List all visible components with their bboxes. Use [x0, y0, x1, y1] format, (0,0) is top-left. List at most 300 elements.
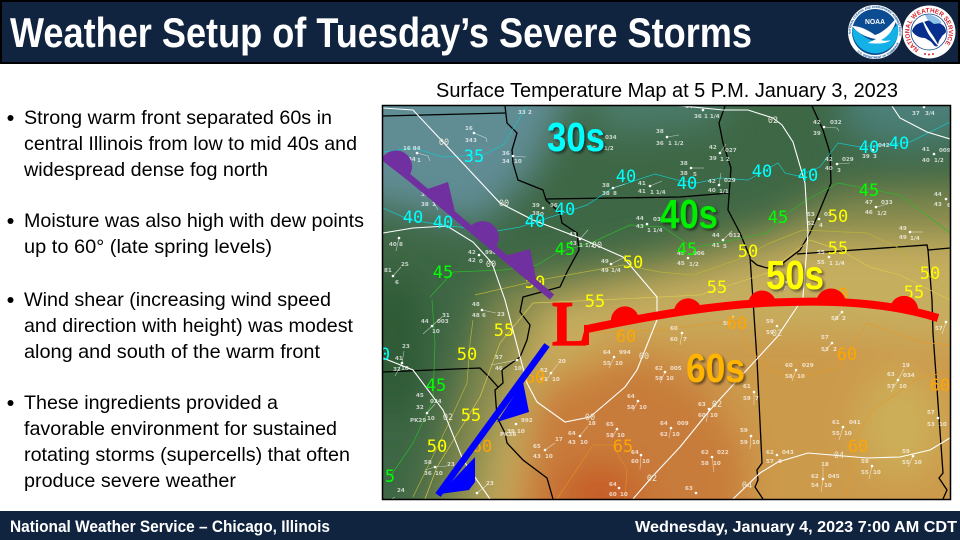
footer: office: National Weather Service – Chicago, Illinois: [10, 517, 330, 536]
station plots: 55: [774, 275, 782, 281]
station plots: 81: [384, 268, 392, 274]
labels: 60-65 orange: 60: [472, 437, 492, 457]
labels: 30s-40s cyan: 35: [464, 147, 484, 167]
station plots: 10: [899, 384, 907, 390]
station plots: 32: [393, 367, 401, 373]
station plots: 63: [887, 372, 895, 378]
labels: 30s-40s cyan: 40: [525, 212, 545, 232]
station plots: 52: [807, 221, 815, 227]
labels: 30s-40s cyan: 40: [403, 208, 423, 228]
icon: NOAA logo: NOAA: [865, 17, 886, 26]
station plots: 54: [811, 483, 819, 489]
station plots: 58: [627, 405, 635, 411]
isotherms: [383, 106, 950, 499]
station plots: 62: [811, 474, 819, 480]
station plots: 43: [533, 454, 541, 460]
station plots: 57: [821, 335, 829, 341]
station plots: 4: [819, 223, 823, 229]
station plots: 1: [432, 202, 436, 208]
station plots: 49: [601, 268, 609, 274]
station plots: 17: [555, 437, 563, 443]
labels: 30s-40s cyan: 0: [380, 345, 390, 365]
station plots: 10: [401, 366, 409, 372]
station plots: 43: [569, 232, 577, 238]
station plots: 43: [636, 224, 644, 230]
station plots: 34: [502, 159, 510, 165]
station plots: 38: [602, 183, 610, 189]
station plots: 1 1/4: [829, 261, 845, 267]
station plots: 029: [724, 178, 736, 184]
station plots: 1/4: [910, 236, 920, 242]
station plots: 25: [401, 262, 409, 268]
station plots: 32: [416, 405, 424, 411]
station plots: 23: [447, 462, 455, 468]
labels: 60-65 orange: 60: [727, 314, 747, 334]
labels: 30s-40s cyan: 40: [859, 138, 879, 158]
isobar labels: 00: [639, 352, 649, 362]
header bar: [0, 0, 960, 64]
bullet: wind shear: along and south of the warm front: [24, 341, 321, 363]
station plots: 10: [639, 405, 647, 411]
labels: 30s-40s cyan: [380, 134, 909, 365]
labels: 50-55 yellow: 50: [525, 273, 545, 293]
station plots: 36: [694, 114, 702, 120]
label: 30s: 30s: [547, 114, 605, 160]
station plots: 009: [677, 421, 689, 427]
station plots: 0: [479, 259, 483, 265]
labels: 45 green: [385, 181, 879, 487]
station plots: 3: [473, 138, 477, 144]
station plots: 992: [521, 418, 533, 424]
labels: 50-55 yellow: 50: [457, 345, 477, 365]
station plots: 38: [680, 161, 688, 167]
cold front: [438, 345, 547, 495]
map heading: Surface Temperature Map at 5 P.M. January 3, 2023: [436, 80, 898, 102]
station plots: 03: [824, 212, 832, 218]
station plots: 34: [408, 157, 416, 163]
occluded front: [383, 150, 552, 297]
warm front: [584, 288, 938, 345]
station plots: 8: [778, 459, 782, 465]
station plots: 65: [606, 422, 614, 428]
station plots: 41: [540, 377, 548, 383]
station plots: 14: [685, 104, 693, 110]
station plots: 46: [495, 366, 503, 372]
station plots: 59: [766, 330, 774, 336]
station plots: 19: [902, 363, 910, 369]
station plots: 64: [568, 431, 576, 437]
station plots: PK29: [410, 418, 426, 424]
labels: 50-55 yellow: 55: [904, 283, 924, 303]
station plots: 16 84: [403, 146, 421, 152]
station plots: 49: [601, 259, 609, 265]
station plots: 10: [914, 460, 922, 466]
isobar labels: 04: [834, 451, 844, 461]
station plots: 10: [427, 416, 435, 422]
station plots: 1 1/2: [668, 141, 684, 147]
station plots: 55: [832, 431, 840, 437]
station plots: 033: [881, 200, 893, 206]
station plots: 10: [844, 431, 852, 437]
labels: 50-55 yellow: 55: [707, 278, 727, 298]
station plots: 6: [482, 313, 486, 319]
station plots: 36: [424, 471, 432, 477]
isobar labels: 00: [486, 260, 496, 270]
station plots: 43: [569, 241, 577, 247]
isobars: [383, 105, 950, 499]
station plots: 60: [698, 413, 706, 419]
station plots: 58: [655, 376, 663, 382]
station plots: 032: [653, 217, 665, 223]
station plots: 46: [865, 210, 873, 216]
isobar labels: 00: [592, 241, 602, 251]
station plots: 38: [680, 171, 688, 177]
station plots: 24: [397, 488, 405, 494]
station plots: 1 1/4: [650, 190, 666, 196]
station plots: 998: [485, 250, 497, 256]
station plots: 10: [939, 422, 947, 428]
station plots: 23: [497, 312, 505, 318]
station plots: 62: [766, 450, 774, 456]
labels: 50-55 yellow: 50: [920, 264, 940, 284]
station plots: 029: [802, 363, 814, 369]
station plots: 59: [902, 449, 910, 455]
station plots: 40: [922, 158, 930, 164]
station plots: 42: [825, 157, 833, 163]
bullet: warm front: Strong warm front separated 60s in: [24, 107, 332, 129]
labels: 60-65 orange: 60: [930, 376, 950, 396]
station plots: 39: [532, 203, 540, 209]
station plots: 39: [507, 429, 515, 435]
station plots: 10: [514, 159, 522, 165]
station plots: 43: [568, 440, 576, 446]
label: 40s: 40s: [660, 191, 718, 237]
station plots: 42: [709, 145, 717, 151]
footer bar: [0, 511, 960, 540]
station plots: 31: [442, 313, 450, 319]
bullet: wind shear: Wind shear (increasing wind speed: [24, 289, 331, 311]
station plots: 1/4: [611, 268, 621, 274]
labels: 60-65 orange: 60: [616, 327, 636, 347]
station plots: 18: [821, 462, 829, 468]
station plots: 45: [416, 393, 424, 399]
station plots: 032: [830, 120, 842, 126]
station plots: 41: [922, 147, 930, 153]
station plots: 48: [472, 313, 480, 319]
labels: 60-65 orange: 0: [838, 285, 848, 305]
station plots: 60: [631, 459, 639, 465]
station plots: 57: [887, 384, 895, 390]
station plots: 042: [878, 143, 890, 149]
isobar labels: 02: [772, 329, 782, 339]
station plots: 003: [437, 319, 449, 325]
labels: 45 green: 45: [677, 240, 697, 260]
labels: 45 green: 5: [385, 467, 395, 487]
isobar labels: 02: [647, 474, 657, 484]
station plots: 42: [468, 258, 476, 264]
station plots: 62: [655, 366, 663, 372]
bullet: warm front: widespread dense fog north: [23, 159, 268, 181]
station plots: 3: [873, 154, 877, 160]
station plots: 994: [619, 350, 631, 356]
station plots: 41: [638, 181, 646, 187]
station plots: 027: [725, 148, 737, 154]
station plots: 58: [785, 374, 793, 380]
station plots: 59: [740, 428, 748, 434]
station plots: 49: [899, 235, 907, 241]
station plots: 7: [783, 286, 787, 292]
station plots: 55: [603, 361, 611, 367]
station plots: 60: [670, 326, 678, 332]
labels: 50-55 yellow: 50: [738, 242, 758, 262]
station plots: 61: [832, 420, 840, 426]
text block: key points: [8, 107, 364, 492]
title: Weather Setup of Tuesday’s Severe Storms: [10, 9, 752, 56]
station plots: 10: [672, 432, 680, 438]
station plots: 62: [701, 450, 709, 456]
station plots: 1 1/4: [704, 114, 720, 120]
labels: 30s-40s cyan: 40: [752, 162, 772, 182]
station plots: 60: [785, 363, 793, 369]
station plots: 10: [620, 492, 628, 498]
isobar labels: 02: [712, 400, 722, 410]
station plots: 2: [528, 110, 532, 116]
station plots: 005: [670, 366, 682, 372]
labels: 60-65 orange: 65: [613, 437, 633, 457]
station plots: 36: [588, 146, 596, 152]
bullet: ingredients: These ingredients provided a: [24, 392, 278, 414]
station plots: 10: [517, 429, 525, 435]
station plots: 65: [533, 444, 541, 450]
station plots: 36: [656, 141, 664, 147]
station plots: 041: [849, 420, 861, 426]
station plots: 49: [899, 226, 907, 232]
station plots: 10: [642, 459, 650, 465]
station plots: 55: [902, 460, 910, 466]
labels: 50-55 yellow: 50: [427, 437, 447, 457]
labels: 30s-40s cyan: 40: [798, 166, 818, 186]
station plots: 1: [417, 158, 421, 164]
station plots: 53: [807, 212, 815, 218]
station plots: 55: [817, 260, 825, 266]
station plots: 39: [813, 131, 821, 137]
station plots: 23: [486, 481, 494, 487]
station plots: 022: [717, 450, 729, 456]
labels: 60-65 orange: 60: [837, 345, 857, 365]
station plots: 10: [752, 440, 760, 446]
station plots: 3/4: [925, 111, 935, 117]
station plots: 043: [782, 450, 794, 456]
station plots: 40: [708, 188, 716, 194]
station plots: 53: [821, 347, 829, 353]
station plots: 57: [766, 459, 774, 465]
station plots: 38: [532, 211, 540, 217]
station plots: 57: [927, 410, 935, 416]
station plots: 44: [712, 233, 720, 239]
station plots: 45: [677, 261, 685, 267]
station plots: 10: [580, 440, 588, 446]
station plots: 57: [935, 326, 943, 332]
station plots: 1/2: [689, 262, 699, 268]
station plots: 009: [939, 148, 951, 154]
station plots: 63: [698, 402, 706, 408]
station plots: 20: [558, 359, 566, 365]
station plots: 5: [723, 244, 727, 250]
station plots: 2: [842, 316, 846, 322]
station plots: 58: [606, 433, 614, 439]
station plots: 2: [833, 347, 837, 353]
station plots: 41: [712, 243, 720, 249]
isobar labels: 04: [742, 481, 752, 491]
station plots: 10: [552, 377, 560, 383]
icon: NOAA logo: [848, 5, 902, 59]
station plots: 45: [677, 251, 685, 257]
station plots: 1/1: [719, 189, 729, 195]
labels: 45 green: 45: [555, 240, 575, 260]
station plots: 10: [615, 361, 623, 367]
labels: 50-55 yellow: 50: [623, 253, 643, 273]
station plots: 1 1/2: [579, 243, 595, 249]
labels: 30s-40s cyan: 40: [616, 167, 636, 187]
bullet: ingredients: favorable environment for sustained: [24, 418, 337, 440]
station plots: 10: [824, 483, 832, 489]
station plots: 38: [656, 129, 664, 135]
station plots: 43: [934, 202, 942, 208]
station plots: 029: [842, 157, 854, 163]
labels: 50-55 yellow: 55: [585, 292, 605, 312]
station plots: 38: [421, 202, 429, 208]
labels: 60-65 orange: [472, 285, 950, 457]
station plots: 41: [395, 356, 403, 362]
bullet: ingredients: [8, 392, 350, 492]
station plots: 44: [636, 216, 644, 222]
station plots: 59: [743, 396, 751, 402]
station plots: 34: [465, 138, 473, 144]
station plots: 44: [934, 192, 942, 198]
station plots: 64: [631, 450, 639, 456]
station plots: 48: [472, 302, 480, 308]
isobar labels: 00: [439, 138, 449, 148]
labels: 45 green: 45: [426, 376, 446, 396]
bullet: moisture: Moisture was also high with dew points: [24, 210, 364, 232]
station plots: 53: [927, 422, 935, 428]
labels: 30s-40s cyan: 40: [889, 134, 909, 154]
isobar labels: 00: [585, 413, 595, 423]
temperature contour labels: [380, 134, 950, 487]
station plots: 045: [828, 474, 840, 480]
station plots: 1 2: [720, 157, 730, 163]
station plots: 44: [421, 319, 429, 325]
station plots: 024: [430, 399, 442, 405]
station plots: 18: [588, 421, 596, 427]
map: surface temperature: [382, 104, 952, 500]
bullet: ingredients: rotating storms (supercells) that often: [24, 444, 350, 466]
bullet: moisture: [8, 210, 364, 258]
labels: 45 green: 45: [768, 208, 788, 228]
station plots: 55: [817, 250, 825, 256]
station plots: 006: [693, 251, 705, 257]
station plots: 1 1/4: [647, 228, 663, 234]
labels: 30s-40s cyan: 40: [677, 174, 697, 194]
station plots: 3: [837, 168, 841, 174]
labels: 50-55 yellow: 55: [828, 239, 848, 259]
station plots: 7: [683, 337, 687, 343]
station plots: 39: [709, 156, 717, 162]
station plots: 034: [903, 373, 915, 379]
temperature shading: [383, 106, 950, 499]
station plots: 59: [861, 459, 869, 465]
station plots: 40: [389, 242, 397, 248]
station plots: 6: [395, 280, 399, 286]
station plots: 16: [465, 126, 473, 132]
station plots: 8: [613, 191, 617, 197]
station plots: 64: [609, 482, 617, 488]
station plots: 034: [605, 135, 617, 141]
station plots: 2 1/2: [598, 146, 614, 152]
station plots: 62: [540, 368, 548, 374]
label: 60s: 60s: [686, 345, 745, 391]
station plots: 59: [740, 440, 748, 446]
station plots: 58: [701, 461, 709, 467]
station plots: 10: [435, 471, 443, 477]
low pressure symbol: L: [552, 288, 589, 359]
station plots: 1/2: [877, 211, 887, 217]
bullet: wind shear: and direction with height) was modest: [24, 315, 354, 337]
station plots: 012: [729, 233, 741, 239]
icon: NWS logo: NATIONAL WEATHER SERVICE: [904, 8, 954, 52]
bullet: moisture: up to 60° (late spring levels): [24, 236, 272, 258]
station plots: 58: [831, 316, 839, 322]
station plots: 38: [588, 134, 596, 140]
station plots: 63: [685, 486, 693, 492]
station plots: 42: [708, 179, 716, 185]
station plots: 5: [693, 172, 697, 178]
station plots: 40: [825, 166, 833, 172]
station plots: 61: [743, 384, 751, 390]
station plots: 10: [666, 376, 674, 382]
bullet: warm front: [8, 107, 357, 181]
station plots: 33: [518, 110, 526, 116]
station plots: 39: [862, 154, 870, 160]
station plots: 62: [660, 432, 668, 438]
station plots: 64: [660, 421, 668, 427]
labels: 50-55 yellow: [427, 207, 940, 457]
bullet: wind shear: [8, 289, 354, 363]
icon: NOAA logo: U.S. DEPARTMENT OF COMMERCE: [858, 42, 899, 58]
state boundaries: [383, 106, 950, 499]
labels: 30s-40s cyan: 40: [555, 200, 575, 220]
isobar labels: 02: [768, 116, 778, 126]
station plots: [384, 104, 951, 502]
labels: 60-65 orange: 60: [525, 368, 545, 388]
labels: 45 green: 45: [859, 181, 879, 201]
station plots: PK38: [500, 432, 516, 438]
station plots: 37: [912, 111, 920, 117]
station plots: 64: [627, 394, 635, 400]
station plots: 41: [638, 189, 646, 195]
station plots: 60: [609, 492, 617, 498]
station plots: 42: [813, 120, 821, 126]
station plots: 0: [540, 212, 544, 218]
station plots: 59: [723, 321, 731, 327]
station plots: 10: [432, 329, 440, 335]
station plots: 10: [710, 413, 718, 419]
station plots: 10: [713, 461, 721, 467]
station plots: 57: [495, 355, 503, 361]
station plots: 7: [755, 396, 759, 402]
labels: 30s-40s cyan: 40: [433, 213, 453, 233]
label: 50s: 50s: [766, 252, 824, 298]
